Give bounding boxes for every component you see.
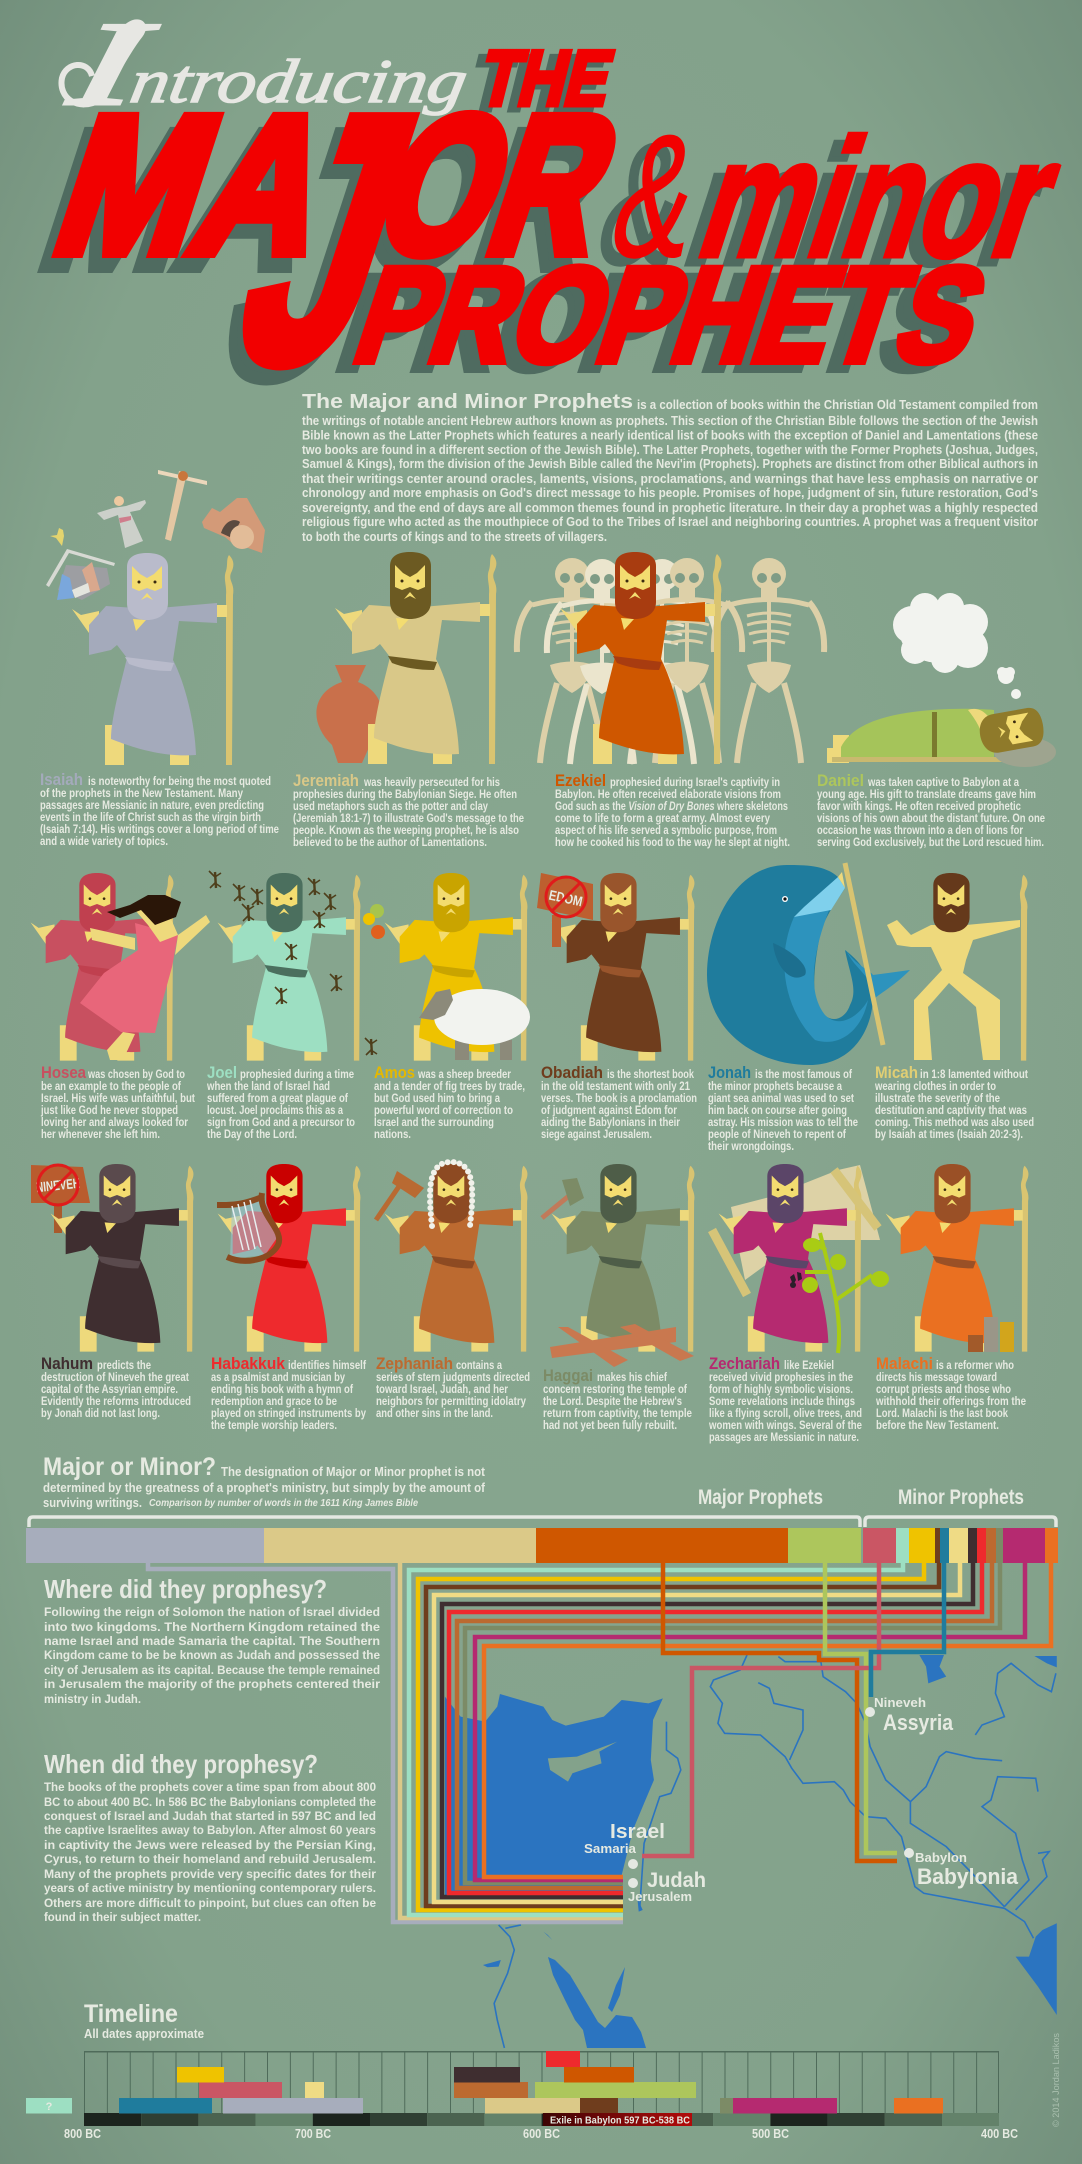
intro text block: that their writings center around oracles, laments, visions, proclamations, and warnings that have less emphasis on narrative or [302, 472, 1038, 486]
text: Ezekiel [555, 771, 790, 849]
text: Obadiah: Obadiah [541, 1063, 603, 1082]
text: Daniel: Daniel [817, 771, 864, 790]
icon: crucifix [158, 470, 207, 541]
text: Habakkuk: played on stringed instruments by [211, 1407, 366, 1420]
chart: word-count bar [26, 1528, 1058, 1563]
text: Haggai: the Lord. Despite the Hebrew's [543, 1395, 682, 1408]
text: Obadiah: verses. The book is a proclamation [541, 1092, 697, 1105]
section: Where did they prophesy: Kingdom came to be be known as Judah and possessed the [44, 1648, 380, 1662]
brackets [29, 1517, 1056, 1527]
text: Zechariah: Some revelations include things [709, 1395, 855, 1408]
text: Nahum: capital of the Assyrian empire. [41, 1383, 178, 1396]
text: Hosea: her whenever she left him. [41, 1128, 160, 1141]
heading: Major or Minor: Comparison by number of words in the 1611 King James Bible [149, 1498, 418, 1509]
icon: nativity [46, 528, 115, 600]
text: Joel [206, 1063, 355, 1141]
text: Hosea: just like God he never stopped [40, 1104, 178, 1117]
section: Where did they prophesy: Where did they prophesy? [44, 1574, 327, 1604]
chart: timeline [26, 2051, 1019, 2141]
text: Daniel [817, 771, 1045, 849]
text: Hosea: be an example to the people of [41, 1080, 181, 1093]
text: Malachi: Lord. Malachi is the last book [876, 1407, 1008, 1420]
figure: Jeremiah [335, 552, 496, 764]
figure: Daniel sleeping [827, 593, 1056, 767]
map labels [584, 1695, 1019, 1904]
timeline bars: ? [46, 2101, 53, 2113]
title red words: MA [33, 77, 362, 294]
figure: Joel with locusts [209, 871, 377, 1061]
title shadow: J [188, 56, 441, 451]
timeline axis labels: 600 BC [523, 2126, 561, 2141]
heading: Timeline: Timeline [84, 2000, 178, 2028]
text: Nahum: predicts the [97, 1359, 151, 1372]
section: Where did they prophesy: name Israel and made Samaria the capital. The Southern [44, 1634, 380, 1648]
text: Amos [374, 1063, 525, 1141]
thought cloud [893, 593, 1021, 699]
text: Daniel: young age. His gift to translate dreams gave him [817, 788, 1036, 801]
text: Ezekiel: come to life to form a great army. Almost every [555, 812, 770, 825]
text: Jonah: giant sea animal was used to set [708, 1092, 854, 1105]
text: Obadiah: is the shortest book [607, 1068, 694, 1081]
timeline band [84, 2113, 999, 2126]
text: Habakkuk: ending his book with a hymn of [211, 1383, 353, 1396]
timeline axis labels: 700 BC [295, 2126, 331, 2141]
text: Nahum: Nahum [41, 1354, 93, 1373]
title red words: J [202, 41, 455, 436]
section: When did they prophesy: BC to about 400 BC. In 586 BC the Babylonians completed the [44, 1795, 376, 1809]
text: Jeremiah: was heavily persecuted for his [363, 776, 500, 789]
title red words [33, 34, 1081, 436]
title shadow: OR [341, 92, 628, 309]
figure: Amos with figs and sheep [363, 873, 530, 1061]
text: Joel: when the land of Israel had [206, 1080, 330, 1093]
map labels: Babylon [915, 1850, 967, 1865]
figure: Haggai with hammer and planks [542, 1164, 694, 1367]
timeline axis labels: 400 BC [981, 2126, 1019, 2141]
section: Where did they prophesy: Following the reign of Solomon the nation of Israel divided [44, 1605, 380, 1619]
exile marker: Exile in Babylon 597 BC-538 BC [550, 2114, 690, 2126]
planks [550, 1324, 694, 1367]
text: Amos: nations. [374, 1128, 411, 1141]
text: Joel: the Day of the Lord. [207, 1128, 297, 1141]
island: Cyprus [548, 1742, 617, 1782]
timeline axis labels: 500 BC [752, 2126, 790, 2141]
figure: Nahum with Nineveh sign: NINEVEH [35, 1175, 81, 1195]
text: Jonah: astray. His mission was to tell the [708, 1116, 858, 1129]
text: Ezekiel: Babylon. He often received elaborate visions from [555, 788, 781, 801]
heading: Major or Minor: surviving writings. [43, 1496, 142, 1510]
text: Haggai: makes his chief [597, 1371, 667, 1384]
text: Jonah: people of Nineveh to repent of [708, 1128, 846, 1141]
text: Joel: Joel [207, 1063, 237, 1082]
section: Where did they prophesy: city of Jerusalem as its capital. Because the temple remained [44, 1663, 380, 1677]
text: Obadiah: of judgment against Edom for [541, 1104, 677, 1117]
text: Amos: Israel and the surrounding [374, 1116, 494, 1129]
text: Habakkuk: identifies himself [288, 1359, 366, 1372]
label: Major Prophets: Major Prophets [698, 1486, 823, 1509]
title shadow: MA [19, 92, 348, 309]
text: Jeremiah: believed to be the author of Lamentations. [293, 836, 487, 849]
text: Jeremiah: (Jeremiah 18:1-7) to illustrate God's message to the [293, 812, 524, 825]
text: Micah: by Isaiah at times (Isaiah 20:2-3). [875, 1128, 1023, 1141]
text: Micah: in 1:8 lamented without [920, 1068, 1028, 1081]
section: Where did they prophesy: ministry in Judah. [44, 1692, 141, 1706]
text: Ezekiel: how he cooked his food to the way he slept at night. [555, 836, 790, 849]
heading: Major or Minor: Major or Minor? [43, 1453, 216, 1481]
text: Hosea: loving her and always looked for [41, 1116, 188, 1129]
heading: Major or Minor: The designation of Major or Minor prophet is not [221, 1465, 486, 1479]
text: Malachi: before the New Testament. [876, 1419, 999, 1432]
text: Amos: was a sheep breeder [417, 1068, 511, 1081]
timeline bars [26, 2051, 943, 2114]
text: Isaiah: is noteworthy for being the most quoted [88, 775, 271, 788]
timeline axis labels: 800 BC [64, 2126, 102, 2141]
red sea [548, 1957, 646, 2048]
title shadow [19, 39, 1067, 451]
text: Jeremiah: prophesies during the Babylonian Siege. He often [293, 788, 517, 801]
text: Jonah: is the most famous of [755, 1068, 852, 1081]
text: Jeremiah: Jeremiah [293, 771, 359, 790]
intro text block: to both the courts of kings and to the streets of villagers. [302, 530, 607, 544]
title red words: & [598, 100, 715, 294]
text: Ezekiel: prophesied during Israel's captivity in [610, 776, 780, 789]
text: Joel: suffered from a great plague of [207, 1092, 348, 1105]
text: Jonah [708, 1063, 858, 1153]
map labels: Israel [610, 1821, 665, 1843]
copyright: © 2014 Jordan Ladikos [1051, 2033, 1062, 2127]
text: Malachi: directs his message toward [876, 1371, 997, 1384]
text: Haggai: concern restoring the temple of [543, 1383, 687, 1396]
heading: Major or Minor [43, 1453, 486, 1510]
text: Habakkuk: as a psalmist and musician by [211, 1371, 345, 1384]
section: When did they prophesy: in captivity the Jews were released by the Persian King, [44, 1838, 376, 1852]
text: Nahum [41, 1354, 191, 1420]
text: Obadiah: aiding the Babylonians in their [541, 1116, 680, 1129]
text: Obadiah [541, 1063, 697, 1141]
section: When did they prophesy: conquest of Israel and Judah that started in 597 BC and led [44, 1809, 376, 1823]
intro text block: The Major and Minor Prophets [302, 391, 633, 413]
map labels: Assyria [883, 1710, 954, 1735]
text: Zephaniah: series of stern judgments directed [376, 1371, 530, 1384]
text: Habakkuk: redemption and grace to be [211, 1395, 337, 1408]
text: Amos: but God used him to bring a [374, 1092, 500, 1105]
text: Jeremiah: people. Known as the weeping prophet, he is also [293, 824, 519, 837]
text: Daniel: was taken captive to Babylon at a [867, 776, 1019, 789]
Introducing script: ntroducing [126, 46, 473, 116]
heading: Timeline: All dates approximate [84, 2027, 204, 2041]
figure: Zephaniah with wig and hammer [376, 1162, 527, 1352]
text: Jonah: their wrongdoings. [708, 1140, 794, 1153]
text: Daniel: occasion he was thrown into a den of lions for [817, 824, 1023, 837]
text: Zephaniah [376, 1354, 530, 1420]
section: Where did they prophesy [44, 1574, 380, 1706]
title red words: OR [355, 77, 642, 294]
text: Malachi: Malachi [876, 1354, 933, 1373]
text: Hosea: Hosea [41, 1063, 86, 1082]
section: Where did they prophesy: in Jerusalem the majority of the prophets centered their [44, 1677, 380, 1691]
text: Zephaniah: toward Israel, Judah, and her [376, 1383, 508, 1396]
section: When did they prophesy: When did they prophesy? [44, 1749, 318, 1779]
text: Amos: Amos [374, 1063, 415, 1082]
text: Habakkuk: Habakkuk [211, 1354, 285, 1373]
text: Zechariah: like Ezekiel [784, 1359, 834, 1372]
text: Malachi [875, 1354, 1026, 1432]
text: Haggai: Haggai [543, 1366, 593, 1385]
text: Zechariah: passages are Messianic in nature. [709, 1431, 859, 1444]
figure: Zechariah with scroll and olive tree [712, 1164, 889, 1353]
text: Hosea [40, 1063, 195, 1141]
text: Isaiah: passages are Messianic in nature, even predicting [40, 799, 264, 812]
section: When did they prophesy [44, 1749, 376, 1924]
text: Isaiah: of the prophets in the New Testament. Many [40, 787, 243, 800]
text: Amos: and a tender of fig trees by trade, [374, 1080, 525, 1093]
text: Nahum: Evidently the reforms introduced [41, 1395, 191, 1408]
skeletons [517, 558, 824, 764]
lakes and gulfs [483, 1655, 1057, 2015]
title shadow: & [584, 108, 701, 302]
text: Zechariah [708, 1354, 862, 1444]
intro text block [302, 391, 1038, 544]
text: Zechariah: form of highly symbolic visions. [709, 1383, 853, 1396]
sea: Mediterranean [445, 1694, 663, 1897]
map labels: Judah [647, 1869, 706, 1892]
title shadow: THE [462, 39, 612, 127]
map labels: Nineveh [874, 1695, 926, 1710]
text: Micah: wearing clothes in order to [874, 1080, 996, 1093]
figure: Jonah's whale [707, 863, 910, 1065]
text: Isaiah: events in the life of Christ such as the virgin birth [40, 811, 261, 824]
text: Joel: sign from God and a precursor to [207, 1116, 355, 1129]
text: Isaiah: (Isaiah 7:14). His writings cover a long period of time [40, 823, 279, 836]
section: When did they prophesy: Many of the prophets provide very specific dates for their [44, 1867, 376, 1881]
text: Micah [874, 1063, 1034, 1141]
timeline axis labels [64, 2126, 1019, 2141]
title red words: THE [472, 34, 622, 122]
text: Habakkuk [211, 1354, 366, 1432]
Introducing script: I [59, 0, 166, 131]
text: Jonah: Jonah [708, 1063, 751, 1082]
intro text block: is a collection of books within the Christian Old Testament compiled from [637, 398, 1038, 412]
text: Haggai: had not yet been fully rebuilt. [543, 1419, 677, 1432]
text: Ezekiel: Ezekiel [555, 771, 606, 790]
text: Micah: Micah [875, 1063, 918, 1082]
map [445, 1655, 1057, 2048]
figure: Obadiah with Edom sign [537, 873, 694, 1061]
section: When did they prophesy: The books of the prophets cover a time span from about 800 [44, 1780, 376, 1794]
figure: Isaiah [72, 553, 233, 765]
text: Haggai: return from captivity, the temple [543, 1407, 692, 1420]
map labels: Babylonia [917, 1864, 1019, 1889]
label: Minor Prophets: Minor Prophets [898, 1486, 1024, 1509]
text: Obadiah: siege against Jerusalem. [541, 1128, 652, 1141]
text: Zephaniah: Zephaniah [376, 1354, 453, 1373]
text: Joel: prophesied during a time [240, 1068, 354, 1081]
section: When did they prophesy: Others are more difficult to pinpoint, but clues can often be [44, 1896, 376, 1910]
map labels: Jerusalem [628, 1890, 692, 1904]
map labels: Samaria [584, 1842, 637, 1856]
text: Daniel: favor with kings. He often received prophetic [817, 800, 1021, 813]
text: Zephaniah: and other sins in the land. [376, 1407, 493, 1420]
title [19, 0, 1081, 451]
intro text block: sovereignty, and the end of days are all common themes found in prophetic literature. In their day a prophet was a highly respected [302, 501, 1038, 515]
text: Micah: destitution and captivity that was [875, 1104, 1027, 1117]
text: Obadiah: in the old testament with only 21 [541, 1080, 690, 1093]
icon: Isaiah visions [46, 470, 265, 600]
section: When did they prophesy: years of active ministry by mentioning contemporary rulers. [44, 1881, 376, 1895]
text: Zechariah: Zechariah [709, 1354, 780, 1373]
figure: Malachi with coins [886, 1164, 1028, 1352]
text: Jeremiah [293, 771, 524, 849]
heading: Timeline [84, 2000, 204, 2041]
text: Zephaniah: neighbors for permitting idolatry [376, 1395, 526, 1408]
intro text block: chronology and more emphasis on God's direct message to his people. Promises of hope, judgment of sin, future restoration, God's [302, 486, 1038, 500]
icon: empty tomb [202, 498, 265, 553]
text: Haggai [543, 1366, 692, 1432]
text: Jonah: the minor prophets because a [708, 1080, 842, 1093]
text: Malachi: is a reformer who [936, 1359, 1014, 1372]
figure: Nahum with Nineveh sign [31, 1164, 193, 1352]
text: Habakkuk: the temple worship leaders. [211, 1419, 337, 1432]
figure: Habakkuk with harp [217, 1164, 360, 1352]
figure: Ezekiel [560, 552, 721, 764]
text: Malachi: withhold their offerings from the [875, 1395, 1026, 1408]
text: Jonah: him back on course after going [708, 1104, 847, 1117]
rivers [494, 1655, 1056, 2048]
figure: Micah [887, 873, 1027, 1061]
jar [316, 665, 382, 763]
text: Zechariah: like a flying scroll, olive trees, and [709, 1407, 862, 1420]
text: Jeremiah: used metaphors such as the potter and clay [293, 800, 488, 813]
section: When did they prophesy: the captive Israelites away to Babylon. After almost 60 years [44, 1823, 376, 1837]
text: Micah: coming. This method was also used [875, 1116, 1034, 1129]
text: Amos: powerful word of correction to [374, 1104, 513, 1117]
heading: Major or Minor: determined by the greatness of a prophet's ministry, but simply by the amount of [43, 1481, 486, 1495]
text: Isaiah: Isaiah [40, 770, 83, 789]
text: Nahum: destruction of Nineveh the great [41, 1371, 189, 1384]
figure: Obadiah with Edom sign: EDOM [548, 887, 584, 909]
text: Zechariah: women with wings. Several of the [708, 1419, 862, 1432]
text: Joel: locust. Joel proclaims this as a [207, 1104, 343, 1117]
text: Ezekiel: aspect of his life served a symbolic purpose, from [555, 824, 777, 837]
Introducing script [59, 0, 473, 131]
section: Where did they prophesy: into two kingdoms. The Northern Kingdom retained the [44, 1620, 380, 1634]
text: Isaiah [40, 770, 279, 848]
icon: angel [97, 496, 146, 548]
text: Zechariah: received vivid prophesies in the [709, 1371, 853, 1384]
text: Hosea: Israel. His wife was unfaithful, but [41, 1092, 195, 1105]
text: Hosea: was chosen by God to [87, 1068, 185, 1081]
figure: Hosea and wife [31, 873, 210, 1061]
text: Isaiah: and a wide variety of topics. [40, 835, 168, 848]
section: When did they prophesy: found in their subject matter. [44, 1910, 201, 1924]
routing lines: prophets to kingdoms [148, 1563, 1051, 1922]
text: Nahum: by Jonah did not last long. [41, 1407, 160, 1420]
text: Ezekiel: God such as the Vision of Dry Bones where skeletons [555, 800, 788, 813]
text: Malachi: corrupt priests and those who [876, 1383, 1011, 1396]
text: Micah: illustrate the severity of the [875, 1092, 1000, 1105]
section: When did they prophesy: Cyrus, to return to their homeland and rebuild Jerusalem. [44, 1852, 376, 1866]
text: Zephaniah: contains a [456, 1359, 502, 1372]
